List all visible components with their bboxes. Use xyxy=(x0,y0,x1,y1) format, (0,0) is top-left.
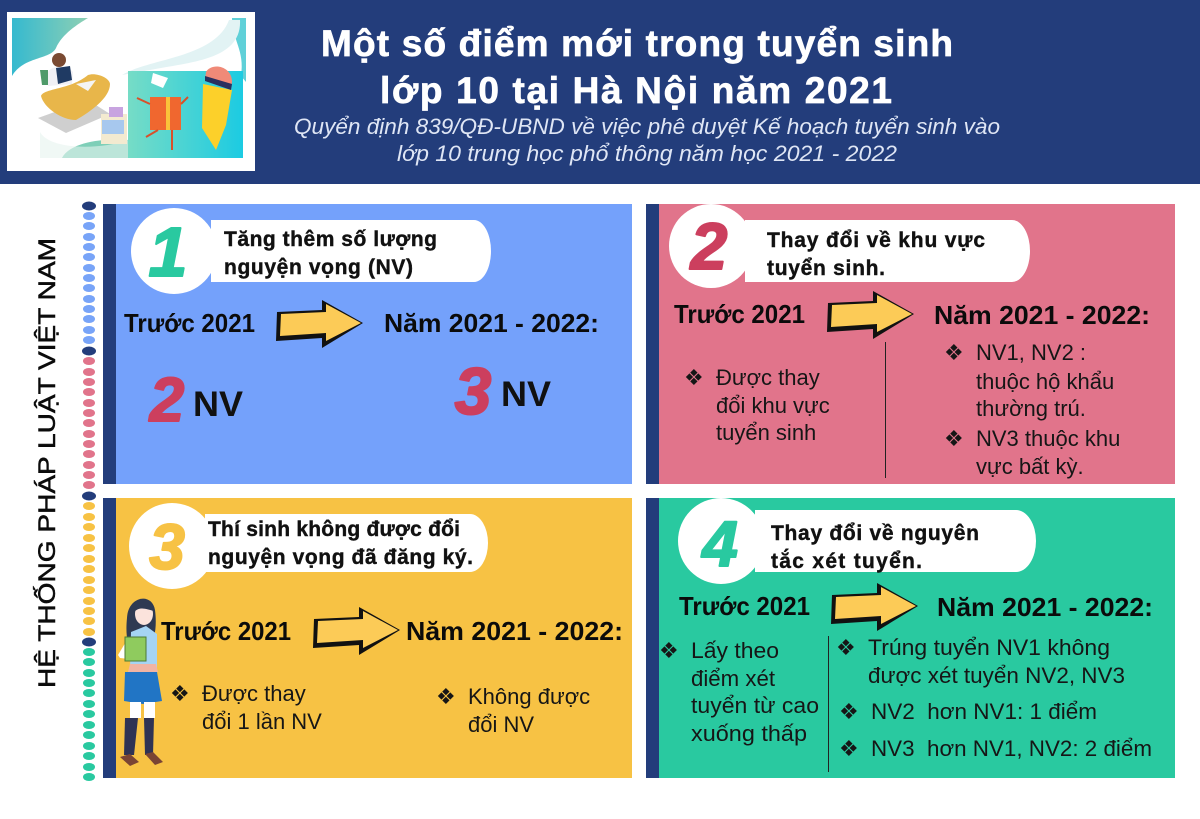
after text: NV3 thuộc khu xyxy=(976,426,1120,451)
heading pill 2: tuyển sinh. xyxy=(767,257,885,280)
panel 4: admission rule xyxy=(646,498,1175,778)
heading pill 2: 2 xyxy=(689,209,728,283)
arrow xyxy=(827,291,914,339)
heading pill 4: 4 xyxy=(700,508,738,580)
title xyxy=(321,23,953,111)
before text: điểm xét xyxy=(691,666,775,691)
after label: Năm 2021 - 2022: xyxy=(384,308,599,338)
arrow xyxy=(831,583,918,631)
after text: NV1, NV2 : xyxy=(976,340,1086,365)
after text xyxy=(836,635,1152,761)
after text: NV2 hơn NV1: 1 điểm xyxy=(871,699,1097,724)
after text: đổi NV xyxy=(468,712,534,737)
value after: NV xyxy=(501,375,552,414)
value before xyxy=(149,366,244,435)
after text: ❖ xyxy=(836,635,856,660)
before label: Trước 2021 xyxy=(674,299,805,329)
after text xyxy=(436,684,590,737)
subtitle: lớp 10 trung học phổ thông năm học 2021 - 2022 xyxy=(397,141,897,166)
before label: Trước 2021 xyxy=(161,616,291,646)
before text: ❖ xyxy=(659,638,679,663)
after label: Năm 2021 - 2022: xyxy=(937,592,1153,622)
before text: ❖ xyxy=(170,681,190,706)
before label: Trước 2021 xyxy=(679,591,810,621)
heading pill 1: 1 xyxy=(149,213,187,291)
vertical side label: HỆ THỐNG PHÁP LUẬT VIỆT NAM xyxy=(33,238,61,688)
after label: Năm 2021 - 2022: xyxy=(934,300,1150,330)
heading pill 3: 3 xyxy=(149,511,185,583)
after text: ❖ xyxy=(436,684,456,709)
heading pill 3 xyxy=(129,503,488,589)
before text xyxy=(684,365,830,445)
value after xyxy=(455,354,552,428)
heading pill 4: Thay đổi về nguyên xyxy=(771,522,979,545)
after text: được xét tuyển NV2, NV3 xyxy=(868,663,1125,688)
title: lớp 10 tại Hà Nội năm 2021 xyxy=(380,70,892,111)
before text: Lấy theo xyxy=(691,638,779,663)
before text: đổi khu vực xyxy=(716,393,830,418)
heading pill 1 xyxy=(131,208,491,294)
after text: thường trú. xyxy=(976,396,1086,421)
value before: NV xyxy=(193,385,244,424)
before text: xuống thấp xyxy=(691,721,807,746)
heading pill 4 xyxy=(678,498,1036,584)
heading pill 3: nguyện vọng đã đăng ký. xyxy=(208,546,473,569)
after text: thuộc hộ khẩu xyxy=(976,369,1114,394)
heading pill 2 xyxy=(669,204,1030,288)
after text: ❖ xyxy=(944,426,964,451)
before text: ❖ xyxy=(684,365,704,390)
before text: tuyển từ cao xyxy=(691,693,819,718)
subtitle xyxy=(294,114,1000,166)
after text: vực bất kỳ. xyxy=(976,454,1084,479)
before text: đổi 1 lần NV xyxy=(202,709,322,734)
title: Một số điểm mới trong tuyển sinh xyxy=(321,23,953,64)
heading pill 2: Thay đổi về khu vực xyxy=(767,229,985,252)
value after: 3 xyxy=(455,354,491,428)
after text: Trúng tuyển NV1 không xyxy=(868,635,1110,660)
after text xyxy=(944,340,1120,479)
arrow xyxy=(313,607,400,655)
after text: NV3 hơn NV1, NV2: 2 điểm xyxy=(871,736,1152,761)
after text: ❖ xyxy=(944,340,964,365)
header band xyxy=(0,0,1200,184)
after text: Không được xyxy=(468,684,590,709)
panel 3: no changes xyxy=(103,498,632,778)
before text: tuyển sinh xyxy=(716,420,816,445)
panel 1: more wishes xyxy=(103,204,632,484)
before text xyxy=(659,638,819,746)
heading pill 1: Tăng thêm số lượng xyxy=(224,228,437,251)
after text: ❖ xyxy=(839,736,859,761)
heading pill 3: Thí sinh không được đổi xyxy=(208,518,460,541)
heading pill 4: tắc xét tuyển. xyxy=(771,549,922,573)
illustration: student xyxy=(118,599,163,766)
after label: Năm 2021 - 2022: xyxy=(406,616,623,646)
heading pill 1: nguyện vọng (NV) xyxy=(224,256,413,279)
dotted timeline xyxy=(82,202,96,781)
value before: 2 xyxy=(149,366,184,435)
before text: Được thay xyxy=(716,365,820,390)
header illustration xyxy=(7,12,255,171)
column divider xyxy=(828,636,829,772)
arrow xyxy=(276,300,363,348)
after text: ❖ xyxy=(839,699,859,724)
before text xyxy=(170,681,322,734)
before text: Được thay xyxy=(202,681,306,706)
before label: Trước 2021 xyxy=(124,308,255,338)
column divider xyxy=(885,342,886,478)
panel 2: enrolment area xyxy=(646,204,1175,484)
subtitle: Quyển định 839/QĐ-UBND về việc phê duyệt Kế hoạch tuyển sinh vào xyxy=(294,114,1000,139)
